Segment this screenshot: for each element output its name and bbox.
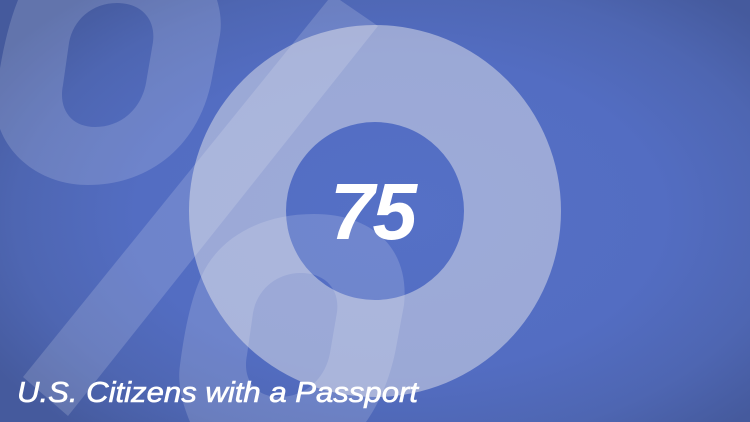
percent sign: upper zero [0, 0, 221, 185]
large percent sign watermark [0, 0, 405, 422]
caption: U.S. Citizens with a Passport [17, 377, 419, 409]
ring gauge [189, 25, 561, 397]
percent sign: lower zero [179, 214, 405, 422]
value: 75: 75 [330, 167, 418, 256]
percent sign: slash [23, 0, 378, 416]
